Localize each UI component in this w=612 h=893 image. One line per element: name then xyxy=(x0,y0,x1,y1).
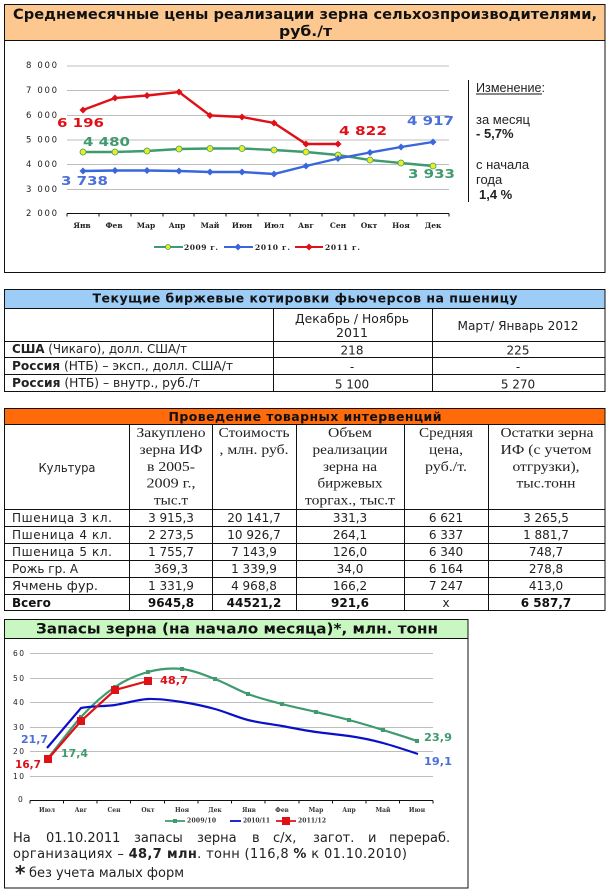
rows: 1 755,7 xyxy=(148,545,194,559)
data labels: 19,1 xyxy=(424,756,452,768)
legend: 2009/10 xyxy=(187,818,216,824)
x axis month labels: Сен xyxy=(108,807,121,814)
rows: 921,6 xyxy=(331,596,369,610)
series: 2010/11 xyxy=(47,699,418,754)
series: 2010 xyxy=(80,138,436,178)
rows: Пшеница 5 кл. xyxy=(12,545,112,559)
legend xyxy=(165,817,326,825)
rows: Рожь гр. А xyxy=(12,562,79,576)
legend: 2011/12 xyxy=(298,818,326,824)
rows: Всего xyxy=(12,596,51,610)
text block: stocks note: с/х, xyxy=(273,831,296,846)
x axis month labels: Апр xyxy=(342,807,356,814)
x axis month labels: Авг xyxy=(75,807,88,814)
data labels: 4 480 xyxy=(83,135,130,149)
x axis month labels xyxy=(39,807,426,814)
x axis month labels: Апр xyxy=(169,221,185,230)
data labels: 48,7 xyxy=(160,675,188,687)
x axis month labels: Июл xyxy=(39,807,56,814)
rows: - xyxy=(350,360,354,374)
heading: average prices: руб./т xyxy=(279,24,333,40)
rows: Пшеница 3 кл. xyxy=(12,511,112,525)
heading: interventions xyxy=(4,408,605,424)
column headers: 2011 xyxy=(336,326,368,340)
panel: futures table xyxy=(4,290,605,392)
rows: 5 270 xyxy=(501,378,535,392)
series: 2011/12 xyxy=(44,677,152,763)
column headers: зерна на xyxy=(323,460,378,475)
x axis month labels: Фев xyxy=(275,807,289,814)
column headers: , млн. руб. xyxy=(220,443,288,458)
x axis month labels: Фев xyxy=(105,221,123,230)
column headers: Средняя xyxy=(419,426,474,441)
x axis month labels: Янв xyxy=(242,807,256,814)
rows: 6 587,7 xyxy=(521,596,571,610)
callout: change: 1,4 % xyxy=(479,187,513,202)
y axis labels: 20 xyxy=(13,747,24,756)
column headers: в 2005- xyxy=(147,460,195,475)
rows: 3 915,3 xyxy=(148,511,194,525)
rows: 1 339,9 xyxy=(231,562,277,576)
callout: change: - 5,7% xyxy=(476,126,514,141)
x axis month labels: Май xyxy=(201,221,220,230)
data labels: 4 917 xyxy=(407,114,454,128)
rows: 1 331,9 xyxy=(148,579,194,593)
panel: grain stocks xyxy=(4,620,468,888)
rows: 3 265,5 xyxy=(523,511,569,525)
x axis month labels: Мар xyxy=(309,807,323,814)
column headers: торгах., тыс.т xyxy=(305,494,395,508)
rows: x xyxy=(442,596,450,610)
rows: Россия (НТБ) – внутр., руб./т xyxy=(12,376,200,390)
x axis month labels: Июн xyxy=(409,807,426,814)
x axis month labels: Июл xyxy=(264,221,285,230)
column headers: ИФ (с учетом xyxy=(500,443,592,458)
data labels: 3 933 xyxy=(408,167,455,181)
callout: change xyxy=(468,80,545,202)
rows: 20 141,7 xyxy=(227,511,281,525)
data labels: 4 822 xyxy=(339,124,387,138)
y axis labels: 0 xyxy=(18,795,23,804)
y axis labels: 8 000 xyxy=(26,61,57,71)
text block: stocks note: организациях – 48,7 млн. тонн (116,8 % к 01.10.2010) xyxy=(13,847,407,862)
data labels: 17,4 xyxy=(61,748,88,760)
rows: 6 337 xyxy=(429,528,463,542)
column headers: отгрузки), xyxy=(512,460,580,475)
rows: 748,7 xyxy=(529,545,563,559)
y axis labels: 2 000 xyxy=(26,209,57,219)
heading: interventions: Проведение товарных интервенций xyxy=(168,409,442,424)
column headers: 2009 г., xyxy=(146,476,196,492)
series: 2011 xyxy=(80,88,342,148)
column headers: Закуплено xyxy=(136,426,206,441)
rows xyxy=(12,342,535,392)
line chart: prices 2009-2011 xyxy=(26,61,455,252)
callout: change: Изменение: xyxy=(476,80,545,95)
y axis labels: 50 xyxy=(13,674,24,683)
y axis labels: 5 000 xyxy=(26,136,57,146)
rows: 218 xyxy=(341,344,363,358)
callout: change: за месяц xyxy=(476,112,531,127)
text block: stocks note: в xyxy=(252,831,260,846)
text block: stocks note: запасы xyxy=(134,831,183,846)
heading: average prices xyxy=(4,4,605,40)
series: 2009/10 xyxy=(48,667,419,758)
rows: 166,2 xyxy=(333,579,367,593)
column headers: цена, xyxy=(429,443,463,458)
callout: change: с начала xyxy=(476,157,530,172)
heading: grain stocks: Запасы зерна (на начало месяца)*, млн. тонн xyxy=(36,622,438,638)
y axis labels: 40 xyxy=(13,698,24,707)
y axis labels: 10 xyxy=(13,772,24,781)
x axis month labels xyxy=(73,221,442,230)
callout: change: года xyxy=(476,172,503,187)
x axis month labels: Авг xyxy=(298,221,314,230)
rows: 5 100 xyxy=(335,378,369,392)
data labels: 16,7 xyxy=(15,759,41,771)
y axis labels: 6 000 xyxy=(26,111,57,121)
legend: 2009 г. xyxy=(184,243,218,252)
x axis month labels: Дек xyxy=(208,807,222,814)
x axis month labels: Янв xyxy=(73,221,91,230)
y axis labels xyxy=(26,61,57,219)
rows: 2 273,5 xyxy=(148,528,194,542)
column headers xyxy=(38,426,594,508)
column headers: руб./т. xyxy=(425,460,467,475)
text block: stocks note: 01.10.2011 xyxy=(46,831,120,846)
rows: Пшеница 4 кл. xyxy=(12,528,112,542)
rows: 4 968,8 xyxy=(231,579,277,593)
rows: 7 247 xyxy=(429,579,463,593)
rows: 1 881,7 xyxy=(523,528,569,542)
x axis month labels: Май xyxy=(376,807,391,814)
data labels: 3 738 xyxy=(61,174,108,188)
rows: 126,0 xyxy=(333,545,367,559)
text block: stocks note: зерна xyxy=(197,831,237,846)
column headers xyxy=(295,312,578,340)
data labels xyxy=(15,675,452,771)
text block: stocks note: и xyxy=(368,831,376,846)
legend: 2010 г. xyxy=(255,243,290,252)
data labels: 21,7 xyxy=(21,734,48,746)
column headers: Декабрь / Ноябрь xyxy=(295,312,409,326)
text block: stocks note xyxy=(13,831,450,885)
rows: 413,0 xyxy=(529,579,563,593)
heading: futures xyxy=(4,290,605,308)
column headers: Март/ Январь 2012 xyxy=(458,319,578,333)
panel: average monthly prices xyxy=(4,4,605,272)
rows: 225 xyxy=(507,344,529,358)
x axis month labels: Окт xyxy=(141,807,155,814)
legend xyxy=(154,243,360,252)
legend: 2011 г. xyxy=(325,243,360,252)
x axis month labels: Ноя xyxy=(392,221,410,230)
rows: 331,3 xyxy=(333,511,367,525)
rows: 264,1 xyxy=(333,528,367,542)
column headers: тыс.тонн xyxy=(516,476,576,492)
column headers: тыс.т xyxy=(154,494,188,508)
data labels: 23,9 xyxy=(424,732,452,744)
rows: Ячмень фур. xyxy=(12,579,98,593)
legend: 2010/11 xyxy=(243,818,270,824)
y axis labels: 60 xyxy=(13,649,24,658)
rows: 278,8 xyxy=(529,562,563,576)
rows: 7 143,9 xyxy=(231,545,277,559)
y axis labels xyxy=(13,649,24,804)
x axis month labels: Июн xyxy=(232,221,253,230)
rows: - xyxy=(516,360,520,374)
x axis month labels: Окт xyxy=(361,221,378,230)
rows: 9645,8 xyxy=(148,596,194,610)
text block: stocks note: перераб. xyxy=(389,831,450,846)
rows: США (Чикаго), долл. США/т xyxy=(12,342,187,356)
column headers: Культура xyxy=(38,461,96,475)
y axis labels: 3 000 xyxy=(26,185,57,195)
heading: futures: Текущие биржевые котировки фьючерсов на пшеницу xyxy=(92,290,518,306)
column headers: Стоимость xyxy=(218,426,290,441)
text block: stocks note: загот. xyxy=(313,831,354,846)
y axis labels: 7 000 xyxy=(26,86,57,96)
rows: 6 164 xyxy=(429,562,463,576)
rows: 10 926,7 xyxy=(227,528,281,542)
x axis month labels: Ноя xyxy=(175,807,190,814)
rows: 369,3 xyxy=(154,562,188,576)
rows: 6 621 xyxy=(429,511,463,525)
series: 2009 xyxy=(80,146,436,169)
x axis month labels: Дек xyxy=(425,221,442,230)
x axis month labels: Сен xyxy=(330,221,347,230)
data labels xyxy=(57,114,455,188)
rows xyxy=(12,511,571,610)
text block: stocks note: без учета малых форм xyxy=(29,866,184,881)
y axis labels: 30 xyxy=(13,723,24,732)
rows: Россия (НТБ) – эксп., долл. США/т xyxy=(12,359,233,373)
data labels: 6 196 xyxy=(57,116,104,130)
column headers: Объем xyxy=(328,426,372,441)
panel: interventions table xyxy=(4,408,605,610)
column headers: реализации xyxy=(312,443,388,458)
rows: 6 340 xyxy=(429,545,463,559)
text block: stocks note: На xyxy=(13,831,31,846)
rows: 34,0 xyxy=(337,562,363,576)
heading: grain stocks xyxy=(4,620,468,638)
x axis month labels: Мар xyxy=(137,221,155,230)
rows: 44521,2 xyxy=(227,596,281,610)
heading: average prices: Среднемесячные цены реализации зерна сельхозпроизводителями, xyxy=(13,7,597,23)
text block: stocks note: * xyxy=(15,861,26,885)
column headers: зерна ИФ xyxy=(140,443,202,458)
column headers: Остатки зерна xyxy=(500,426,594,441)
y axis labels: 4 000 xyxy=(26,160,57,170)
column headers: биржевых xyxy=(318,476,382,492)
line chart: stocks xyxy=(13,649,452,825)
